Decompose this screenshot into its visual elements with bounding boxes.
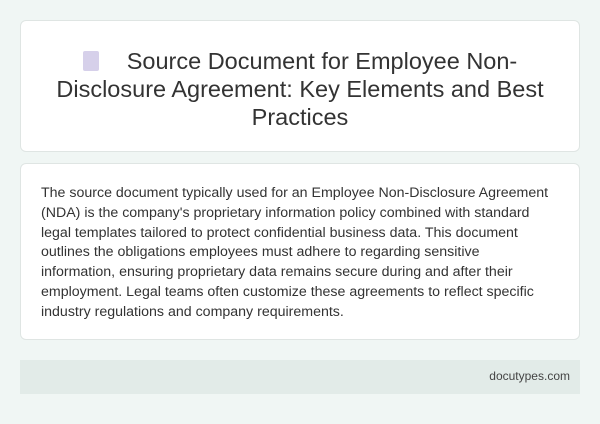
footer	[20, 360, 580, 394]
title: Source Document for Employee Non-	[127, 48, 517, 74]
footer: docutypes.com	[489, 369, 570, 383]
title panel	[20, 20, 580, 152]
icon: document	[83, 51, 99, 71]
panel: description	[20, 163, 580, 340]
text block: The source document typically used for an Employee Non-Disclosure Agreement (NDA) is the company's proprietary information policy combined with standard legal templates tailored to protect confidential business data. This document outlines the obligations employees must adhere to regarding sensitive information, ensuring proprietary data remains secure during and after their employment. Legal teams often customize these agreements to reflect specific industry regulations and company requirements.	[41, 185, 548, 320]
title: Practices	[252, 104, 348, 130]
title	[56, 48, 544, 130]
title: Disclosure Agreement: Key Elements and Best	[56, 76, 544, 102]
